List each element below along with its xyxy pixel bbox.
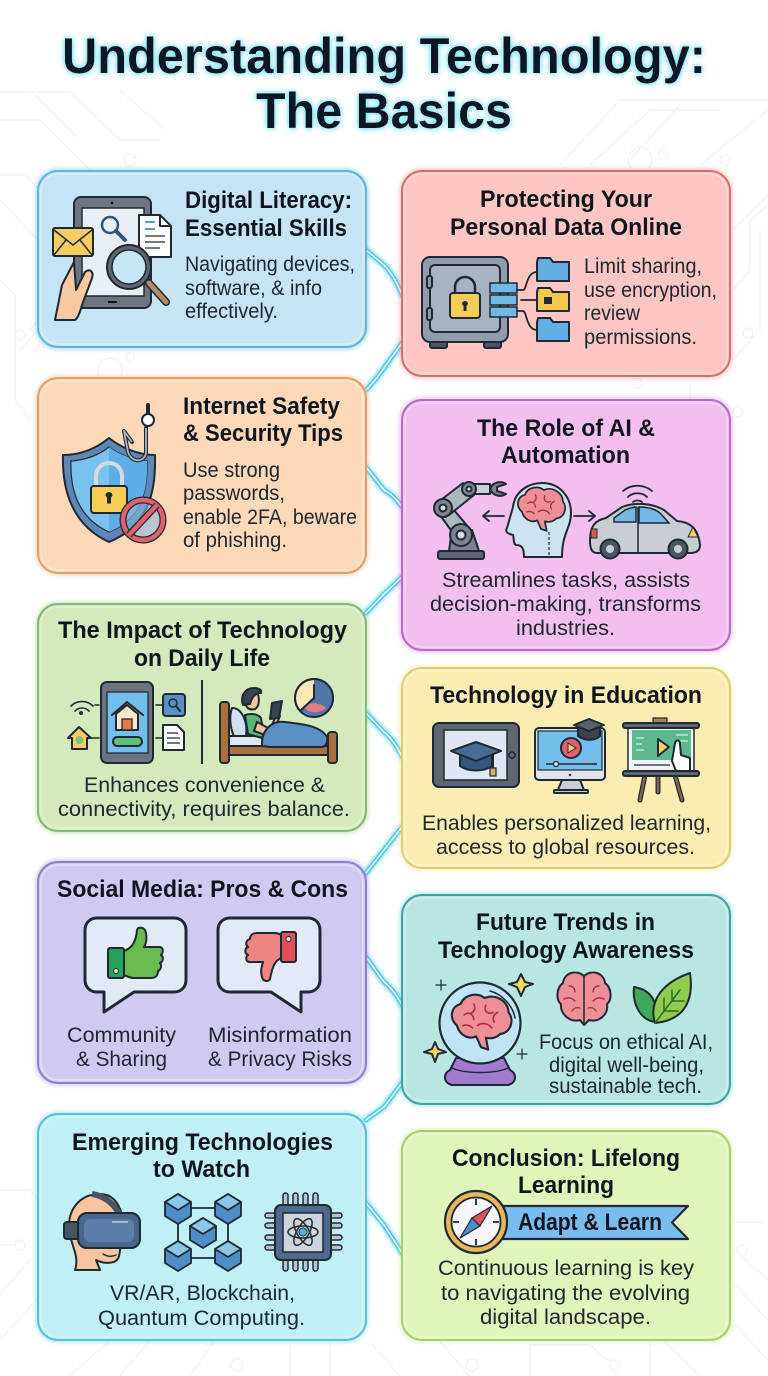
text: community and sharing: Community — [67, 1024, 176, 1047]
text: conclusion description — [438, 1257, 695, 1329]
panel: social media pros and cons — [38, 862, 366, 1083]
title — [62, 28, 706, 139]
panel: digital literacy — [38, 171, 366, 347]
icon: VR headset — [64, 1194, 140, 1270]
heading: social media: Social Media: Pros & Cons — [57, 876, 348, 903]
panel: impact on daily life — [38, 604, 366, 831]
icon: person with phone in bed and clock — [220, 679, 337, 763]
icon: tablet with graduation cap — [433, 723, 519, 787]
text: emerging technologies description: VR/AR, Blockchain, — [110, 1282, 295, 1305]
text: internet safety description: Use strong — [183, 459, 280, 482]
text: misinformation and privacy risks — [208, 1024, 352, 1071]
heading: future trends — [438, 909, 694, 964]
text: misinformation and privacy risks: & Privacy Risks — [208, 1048, 352, 1071]
text: protecting data description — [584, 255, 717, 349]
title: Understanding Technology: — [62, 28, 706, 84]
icon: quantum chip — [265, 1193, 342, 1271]
icon: green leaf — [634, 973, 691, 1023]
heading: impact on daily life: on Daily Life — [134, 645, 270, 672]
icon: presentation board — [623, 718, 699, 800]
heading: technology in education: Technology in Education — [430, 682, 702, 709]
text: digital literacy description: effectively. — [185, 300, 278, 323]
heading: role of AI: Automation — [501, 442, 630, 469]
text: impact description: Enhances convenience & — [84, 774, 325, 797]
heading: conclusion: Conclusion: Lifelong — [452, 1145, 680, 1172]
text: future trends description: Focus on ethical AI, — [539, 1031, 713, 1054]
heading: emerging technologies: Emerging Technologies — [72, 1129, 333, 1156]
text: emerging technologies description: Quantum Computing. — [98, 1307, 305, 1330]
text: protecting data description: review — [584, 302, 641, 325]
icon: thumbs down speech bubble — [218, 918, 320, 1012]
text: emerging technologies description — [98, 1282, 305, 1330]
text: protecting data description: use encryption, — [584, 279, 717, 302]
divider: convenience and balance — [201, 680, 203, 764]
text: community and sharing — [67, 1024, 176, 1071]
panel: internet safety — [38, 378, 366, 573]
panel: conclusion — [402, 1131, 730, 1340]
heading: role of AI: The Role of AI & — [477, 415, 655, 442]
text: future trends description: digital well-being, — [549, 1054, 704, 1077]
heading: future trends: Future Trends in — [476, 909, 655, 936]
text: role of AI description: Streamlines tasks, assists — [442, 569, 690, 592]
heading: protecting data: Personal Data Online — [450, 214, 682, 241]
heading: digital literacy — [185, 187, 352, 242]
panel: protecting personal data — [402, 171, 730, 376]
text: future trends description: sustainable tech. — [549, 1075, 702, 1098]
heading: conclusion: Learning — [518, 1172, 614, 1199]
arrow: brain to robot — [483, 511, 504, 521]
heading: protecting data: Protecting Your — [480, 186, 652, 213]
icon: connected car — [590, 486, 700, 558]
text: role of AI description — [430, 569, 701, 640]
text: digital literacy description: Navigating devices, — [185, 253, 355, 276]
icon: head with brain — [506, 483, 571, 557]
icon: smartphone with smart home — [68, 682, 185, 763]
heading: internet safety — [183, 393, 343, 447]
text: internet safety description: passwords, — [183, 482, 285, 505]
text: impact description — [58, 774, 350, 821]
icon: safe with lock, server and folders — [422, 257, 569, 348]
arrow: brain to car — [574, 511, 595, 521]
text: education description: Enables personalized learning, — [422, 812, 711, 835]
panel: role of AI and automation — [402, 400, 730, 650]
icon: thumbs up speech bubble — [85, 918, 186, 1012]
text: community and sharing: & Sharing — [76, 1048, 167, 1071]
heading: emerging technologies: to Watch — [153, 1156, 250, 1183]
icon: compass — [445, 1191, 507, 1253]
heading: role of AI — [477, 415, 655, 469]
text: role of AI description: industries. — [516, 617, 615, 640]
text: internet safety description: enable 2FA, beware — [183, 506, 357, 529]
text: future trends description — [539, 1031, 713, 1098]
text: impact description: connectivity, requires balance. — [58, 798, 350, 821]
text: digital literacy description — [185, 253, 355, 323]
text: protecting data description: permissions. — [584, 326, 697, 349]
text: conclusion description: digital landscape. — [480, 1306, 651, 1329]
heading: protecting data — [450, 186, 682, 241]
text: misinformation and privacy risks: Misinformation — [208, 1024, 352, 1047]
panel: technology in education — [402, 668, 730, 868]
text: education description — [422, 812, 711, 859]
heading: internet safety: Internet Safety — [183, 393, 341, 420]
heading: internet safety: & Security Tips — [183, 420, 343, 447]
title: The Basics — [256, 83, 512, 139]
heading: conclusion — [452, 1145, 680, 1199]
banner: adapt and learn: Adapt & Learn — [518, 1209, 662, 1236]
icon: blockchain cubes — [165, 1194, 241, 1271]
icon: robot arm — [434, 482, 506, 559]
connectors between cards — [366, 250, 402, 1253]
icon: crystal ball with brain — [424, 974, 533, 1085]
text: conclusion description: Continuous learning is key — [438, 1257, 695, 1280]
text: conclusion description: to navigating the evolving — [441, 1282, 690, 1305]
icon: monitor with video lesson — [535, 719, 605, 793]
text: protecting data description: Limit sharing, — [584, 255, 702, 278]
icon: tablet with magnifier, document, envelope and hand — [53, 197, 171, 320]
panel: future trends — [402, 895, 730, 1104]
text: education description: access to global resources. — [436, 836, 695, 859]
panel: emerging technologies — [38, 1114, 366, 1340]
heading: future trends: Technology Awareness — [438, 937, 694, 964]
text: digital literacy description: software, & info — [185, 277, 322, 300]
heading: emerging technologies — [72, 1129, 333, 1183]
heading: digital literacy: Digital Literacy: — [185, 187, 352, 214]
heading: impact on daily life — [58, 617, 348, 672]
heading: digital literacy: Essential Skills — [185, 215, 347, 242]
icon: shield, lock, fishing hook and prohibition sign — [63, 405, 163, 542]
text: internet safety description: of phishing. — [183, 529, 287, 552]
text: internet safety description — [183, 459, 357, 552]
icon: brain — [557, 972, 611, 1025]
heading: impact on daily life: The Impact of Technology — [58, 617, 348, 644]
text: role of AI description: decision-making, transforms — [430, 593, 701, 616]
